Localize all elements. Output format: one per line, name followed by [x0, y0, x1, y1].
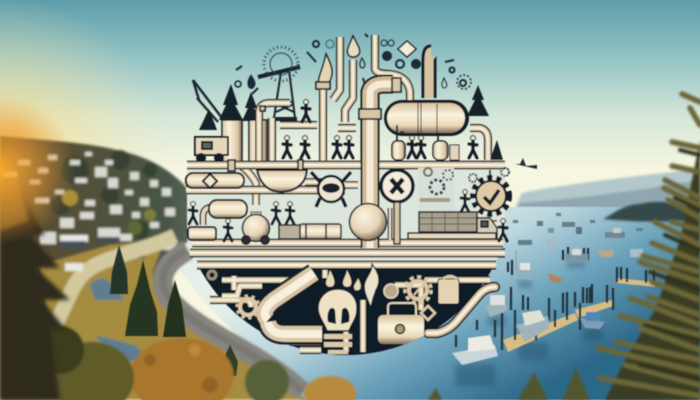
small round gauge — [384, 284, 398, 298]
small gear top left — [208, 271, 216, 279]
boats and docks — [452, 213, 655, 365]
storage silos — [222, 120, 267, 162]
flame — [364, 264, 379, 308]
lower half icons — [208, 264, 459, 354]
warning diamond — [398, 41, 416, 57]
central valve — [311, 172, 351, 207]
oil derrick — [258, 67, 300, 119]
bottom water conifers — [428, 368, 590, 400]
pipes — [186, 35, 505, 352]
checkmark gear — [473, 170, 509, 214]
small aircraft — [515, 158, 537, 169]
crane — [193, 80, 222, 122]
rocky shore — [163, 250, 303, 392]
bottom dark half — [200, 268, 492, 356]
tanker train — [279, 224, 341, 239]
droplet icon — [347, 36, 360, 57]
lawns and golden ground — [40, 240, 305, 400]
gear cluster — [418, 168, 509, 214]
X gauge — [381, 170, 413, 244]
forest slope — [0, 136, 300, 400]
left conifer — [0, 178, 70, 400]
pine trees — [199, 84, 503, 160]
water droplets — [326, 270, 361, 290]
sun flare over hillside — [0, 90, 90, 250]
shaded house fronts — [60, 237, 145, 271]
distant mountains — [515, 168, 700, 210]
forested island — [603, 202, 690, 222]
small floating icons — [235, 34, 471, 94]
autumn trees foreground — [36, 326, 356, 400]
utility truck — [195, 137, 228, 162]
emblem band background — [186, 159, 506, 356]
cargo truck — [408, 212, 507, 241]
large horizontal storage tank — [384, 100, 469, 136]
pipe flanges — [228, 78, 401, 171]
boat reflections — [455, 262, 603, 386]
small tree clumps — [62, 190, 156, 235]
flame icon — [319, 54, 332, 86]
hazard diamond — [421, 306, 435, 320]
left hillside with town — [0, 136, 305, 400]
left gear — [240, 299, 256, 315]
dark hill clumps — [50, 150, 157, 239]
road car — [65, 263, 83, 271]
row two left tank — [186, 170, 307, 192]
rocky shading — [163, 250, 303, 392]
houses on the hill — [3, 152, 176, 250]
curving road — [55, 236, 175, 325]
right conifer — [598, 94, 700, 400]
spherical tank small — [242, 212, 270, 244]
central pipeline emblem — [184, 32, 513, 356]
blue pavement — [90, 279, 150, 362]
row one workers and small tanks — [283, 100, 477, 160]
jerrycan — [438, 279, 459, 304]
lightbulb — [318, 289, 357, 331]
sun rays — [270, 53, 292, 75]
water bay — [180, 200, 700, 400]
moored boats — [452, 213, 643, 365]
row three left tank and equipment — [188, 200, 294, 241]
upper silhouettes — [193, 34, 503, 162]
pilings — [456, 247, 654, 350]
main sphere — [350, 204, 390, 240]
right gear — [409, 281, 427, 299]
dock walkways — [503, 278, 655, 352]
shoreline trees — [110, 245, 238, 376]
portable tank — [388, 303, 416, 315]
